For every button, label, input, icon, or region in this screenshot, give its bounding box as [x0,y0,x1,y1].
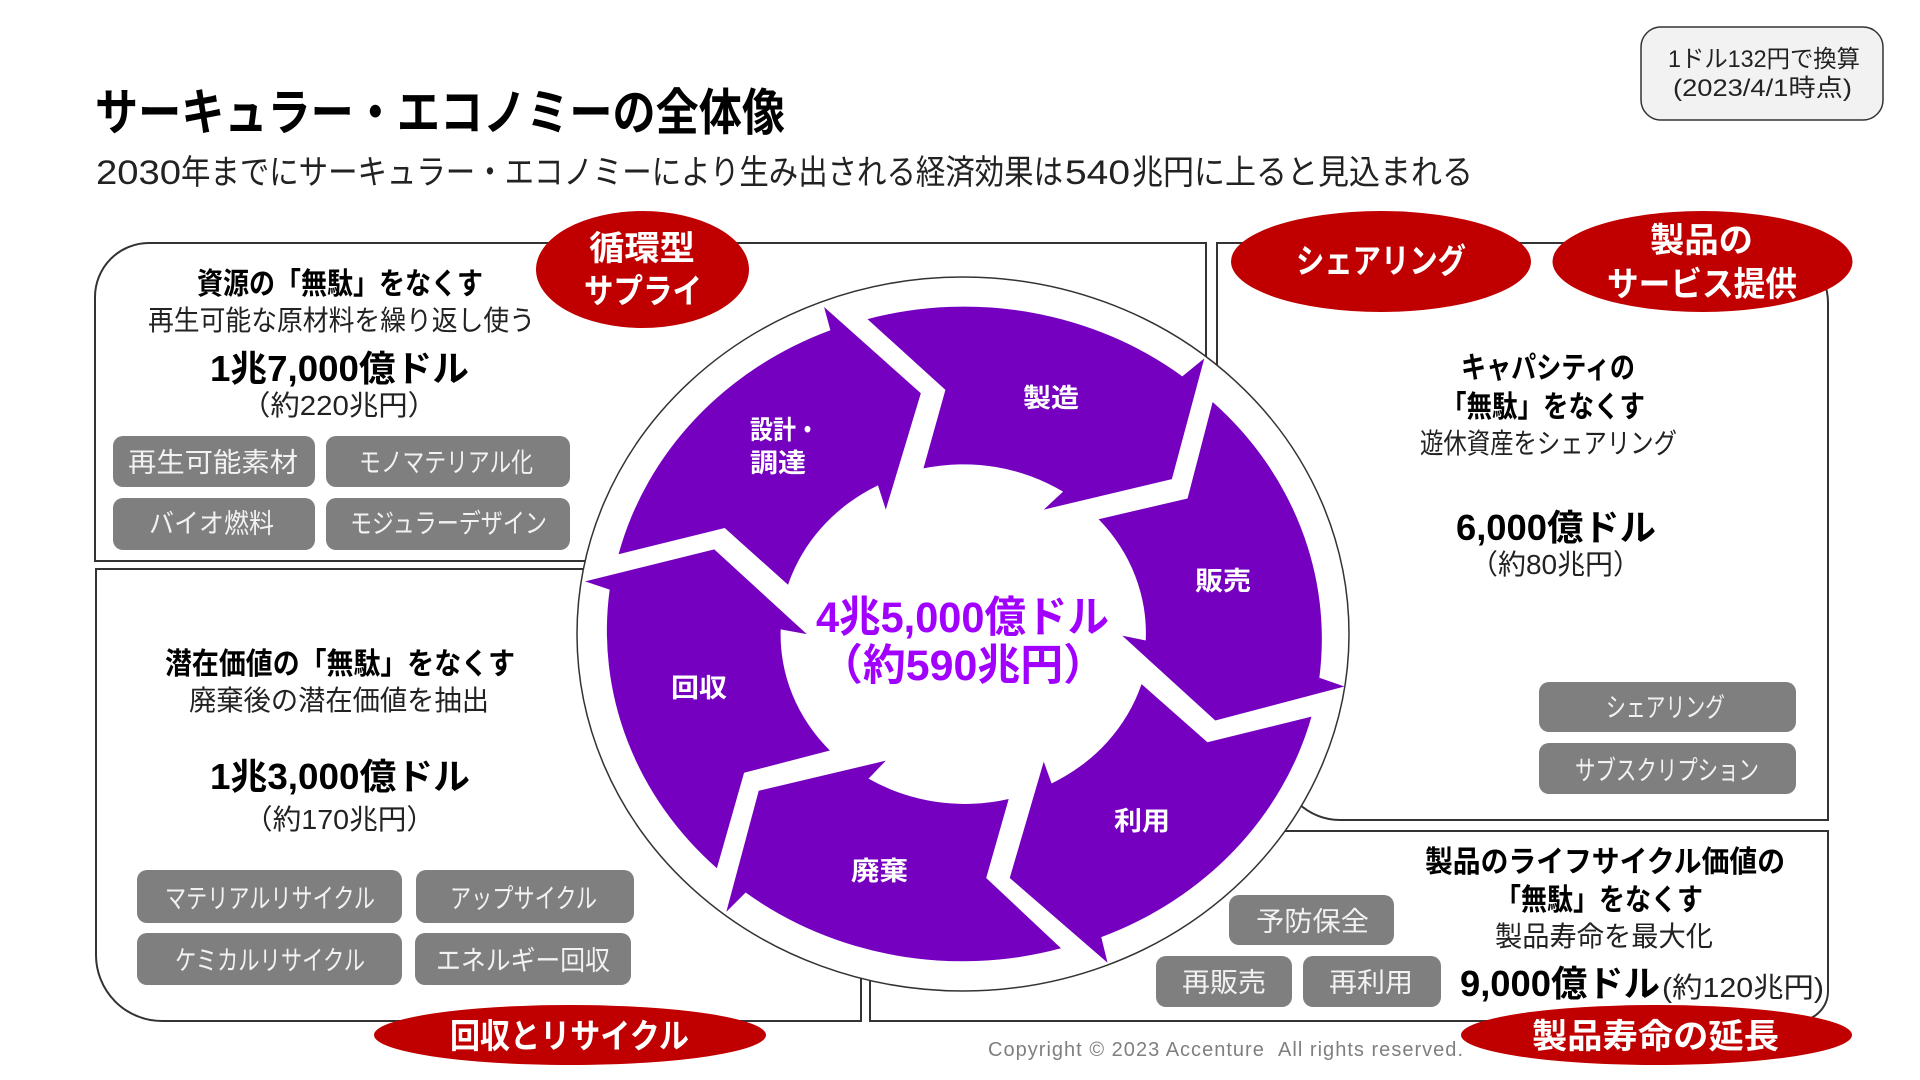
tag: マテリアルリサイクル [165,884,375,914]
tag: ケミカルリサイクル [175,946,365,976]
subtitle: 2030 [96,154,181,192]
arrow: design and procurement [619,307,921,585]
badge: recovery and recycling: 回収とリサイクル [450,1018,689,1056]
value in dollars: 9,000億ドル [1460,963,1660,1004]
panel heading: 「無駄」をなくす [1441,391,1645,424]
label: disposal: 廃棄 [851,856,908,886]
badge: circular supply: サプライ [584,273,702,311]
subtitle: 兆円に上ると見込まれる [1132,154,1473,192]
panel heading [1441,352,1645,424]
panel heading [1425,846,1785,917]
panel description: 遊休資産をシェアリング [1420,428,1677,459]
value in yen: （約170兆円） [244,804,435,835]
title: サーキュラー・エコノミーの全体像 [95,85,785,141]
exchange rate note: 1ドル132円で換算 [1668,46,1860,73]
value in dollars: 6,000億ドル [1456,507,1656,548]
badge: sharing: シェアリング [1296,243,1466,281]
exchange rate note [1641,27,1883,120]
tag: 予防保全 [1256,907,1369,937]
value in dollars: 1兆3,000億ドル [210,756,470,797]
label: design and procurement [750,415,819,478]
label: design and procurement: 設計・ [750,415,819,445]
center total [816,594,1109,690]
panel description: 廃棄後の潜在価値を抽出 [189,685,489,716]
arrow: disposal [726,761,1061,961]
badge: sharing [1231,211,1531,312]
tag [1303,956,1441,1007]
label: use: 利用 [1114,806,1170,836]
tag [1156,956,1292,1007]
label: manufacturing: 製造 [1023,383,1079,413]
center total: （約590兆円） [820,642,1106,690]
tag: エネルギー回収 [436,946,610,976]
badge: product as a service [1552,211,1852,312]
badge: product as a service: サービス提供 [1607,266,1797,304]
panel: sharing and product as a service [1217,243,1828,820]
copyright: Copyright © 2023 Accenture All rights reserved. [988,1039,1463,1061]
tag: アップサイクル [450,884,597,914]
tag: 再生可能素材 [128,448,298,478]
tag [137,870,402,923]
badge: recovery and recycling [374,1005,766,1065]
panel: recovery and recycling [96,569,861,1021]
tag: 再利用 [1329,968,1413,998]
label: collection: 回収 [671,673,727,703]
panel description: 再生可能な原材料を繰り返し使う [148,305,535,336]
tag [1539,743,1796,794]
panel: circular supply [95,243,1206,561]
tag [326,498,570,550]
tag: バイオ燃料 [149,509,274,539]
value in yen: (約120兆円) [1662,972,1824,1003]
subtitle: 年までにサーキュラー・エコノミーにより生み出される経済効果は [181,154,1063,192]
panel heading: キャパシティの [1461,352,1635,385]
tag: モノマテリアル化 [359,448,533,478]
tag: シェアリング [1606,693,1725,723]
arrow: sales [1099,402,1344,720]
subtitle: 540 [1065,154,1130,192]
arrow: use [1010,684,1311,963]
exchange rate note: (2023/4/1時点) [1673,75,1852,102]
value in dollars: 1兆7,000億ドル [210,348,469,389]
label: design and procurement: 調達 [750,448,806,478]
tag [113,436,315,487]
tag: モジュラーデザイン [350,509,547,539]
panel heading: 資源の「無駄」をなくす [197,268,483,301]
panel description: 製品寿命を最大化 [1495,921,1713,952]
tag: 再販売 [1182,968,1266,998]
cycle diagram [577,277,1349,991]
panel heading: 潜在価値の「無駄」をなくす [165,648,515,681]
badge: circular supply: 循環型 [589,230,695,268]
tag [415,933,631,985]
panel heading: 製品のライフサイクル価値の [1425,846,1785,879]
center total: 4兆5,000億ドル [816,594,1109,642]
tag [137,933,402,985]
tag [113,498,315,550]
tag [1539,682,1796,732]
value in yen: （約80兆円） [1470,549,1641,580]
label: sales: 販売 [1195,566,1251,596]
tag [416,870,634,923]
tag: サブスクリプション [1575,756,1759,786]
value in yen: （約220兆円） [241,390,437,421]
tag [1229,895,1394,945]
badge: product as a service: 製品の [1650,222,1753,260]
tag [326,436,570,487]
badge: circular supply [536,211,749,328]
badge: product life extension: 製品寿命の延長 [1532,1018,1779,1056]
panel heading: 「無駄」をなくす [1495,884,1703,917]
arrow: manufacturing [868,307,1204,510]
arrow: collection [585,549,830,868]
badge: product life extension [1461,1005,1852,1065]
panel: product life extension [870,831,1828,1021]
